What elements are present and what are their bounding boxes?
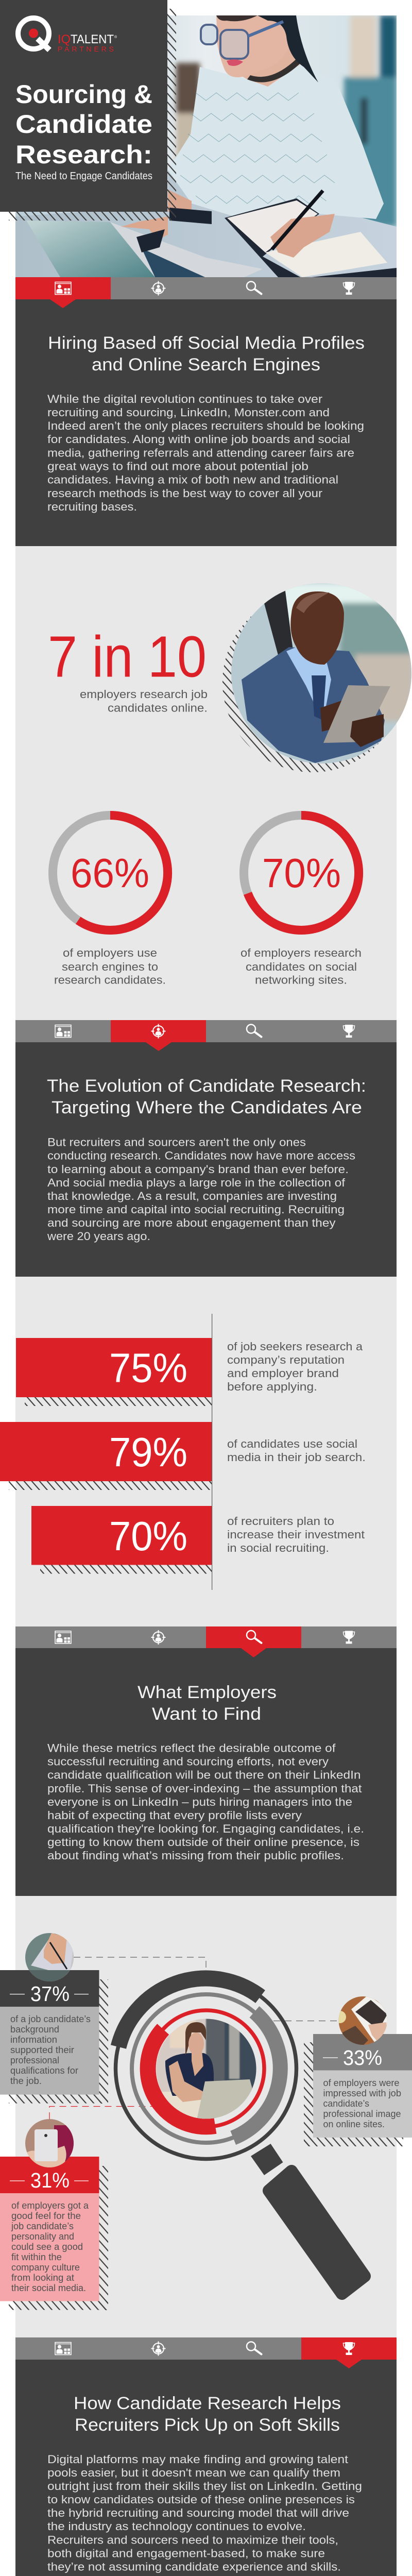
caption: 70 percent: increase their investment (227, 1528, 365, 1541)
body text: more time and capital into social recruiting. Recruiting (47, 1203, 345, 1216)
chart: 66 percent ring (53, 815, 168, 930)
body text: candidates. Having a mix of both new and traditional (47, 473, 338, 486)
heading: Recruiters Pick Up on Soft Skills (75, 2415, 340, 2435)
card: 33 percent: professional image (323, 2109, 401, 2119)
caption: 75 percent: and employer brand (227, 1367, 339, 1380)
caption: 79 percent (227, 1437, 366, 1464)
caption: social networking (241, 946, 362, 986)
card: 31 percent: of employers got a (11, 2200, 89, 2211)
body text: qualification they're looking for. Engaging candidates, i.e. (47, 1822, 364, 1835)
caption: search engines: research candidates. (54, 974, 166, 986)
body text: profile. This sense of over-indexing – the assumption that (47, 1782, 362, 1795)
caption: 79 percent: media in their job search. (227, 1451, 366, 1464)
stat caption: candidates online. (108, 702, 208, 715)
caption: 79 percent: of candidates use social (227, 1437, 357, 1450)
title (15, 80, 152, 169)
heading (138, 1683, 277, 1724)
bar: 75 percent (16, 1338, 212, 1406)
heading: and Online Search Engines (92, 355, 320, 375)
caption: social networking: of employers research (241, 946, 362, 959)
caption: social networking: candidates on social (246, 960, 357, 973)
card: 31 percent: personality and (11, 2231, 74, 2242)
body text: habit of expecting that every profile lists every (47, 1809, 302, 1822)
section nav: tab one active (15, 277, 397, 308)
body text: conducting research. Candidates now have more access (47, 1149, 355, 1162)
card: 33 percent (304, 1995, 412, 2146)
bar: 79 percent: 79% (109, 1429, 187, 1475)
card: 37 percent: professional (10, 2055, 59, 2065)
section nav: tab four active (15, 2337, 397, 2368)
card: 37 percent: supported their (10, 2045, 74, 2055)
body text: And social media plays a large role in the collection of (47, 1176, 346, 1189)
body text: Indeed aren’t the only places recruiters should be looking (47, 419, 364, 432)
body text: recruiting bases. (47, 500, 137, 513)
body text: for candidates. Along with online job boards and social (47, 433, 350, 446)
body text: and sourcing are more about engagement than they (47, 1216, 336, 1229)
card: 31 percent: good feel for the (11, 2211, 81, 2221)
caption: 75 percent (227, 1340, 363, 1393)
body text: candidate qualification will be out there on their LinkedIn (47, 1769, 360, 1782)
connector: 37 percent (74, 1957, 206, 1971)
body text: pools easier, but it doesn't mean we can qualify them (47, 2466, 340, 2479)
card: 31 percent: job candidate’s (11, 2221, 74, 2231)
card: 37 percent: of a job candidate’s (10, 2014, 91, 2024)
card: 33 percent: 33% (343, 2046, 382, 2070)
card: 33 percent: of employers were (323, 2078, 400, 2088)
body text (47, 1136, 355, 1243)
body text: the hybrid recruiting and sourcing model that will drive (47, 2506, 349, 2519)
card: 31 percent: could see a good (11, 2242, 83, 2252)
photo: hand holding phone (25, 2119, 75, 2168)
heading (47, 1076, 366, 1117)
heading (48, 333, 365, 375)
logo: IQTalent Partners: ® (114, 35, 117, 39)
heading: Targeting Where the Candidates Are (52, 1098, 362, 1117)
panel: evolution of candidate research (15, 1020, 397, 1277)
stat caption (80, 688, 208, 715)
body text: were 20 years ago. (47, 1230, 150, 1243)
body text: both digital and engagement-based, to make sure (47, 2547, 325, 2560)
body text: While these metrics reflect the desirable outcome of (47, 1741, 336, 1755)
heading: Want to Find (152, 1704, 261, 1724)
body text: research methods is the best way to cover all your (47, 487, 322, 500)
bar: 70 percent (31, 1506, 212, 1573)
body text: the industry as technology continues to evolve. (47, 2520, 306, 2533)
body text: to learning about a company's brand than ever before. (47, 1163, 349, 1176)
panel: employer research stats (15, 546, 412, 1020)
body text: recruiting and sourcing, LinkedIn, Monster.com and (47, 406, 330, 419)
card: 37 percent (0, 1933, 108, 2104)
body text: Digital platforms may make finding and growing talent (47, 2453, 348, 2466)
caption: search engines: of employers use (63, 946, 157, 959)
body text: While the digital revolution continues to take over (47, 393, 322, 405)
caption: 75 percent: of job seekers research a (227, 1340, 363, 1353)
panel: hero (0, 0, 397, 308)
caption: 70 percent: of recruiters plan to (227, 1515, 334, 1528)
stat: 7 in 10: 7 in 10 (48, 624, 207, 689)
subtitle: The Need to Engage Candidates (15, 171, 152, 182)
body text: they’re not assuming candidate experience and skills. (47, 2561, 341, 2573)
caption: 70 percent (227, 1515, 365, 1554)
heading (74, 2394, 341, 2435)
photo: hands typing (339, 1996, 387, 2045)
title: Sourcing & (15, 80, 152, 109)
caption: 75 percent: before applying. (227, 1380, 317, 1393)
card: 37 percent: 37% (30, 1982, 70, 2006)
card: 37 percent: qualifications for (10, 2065, 78, 2076)
section nav: tab three active (15, 1626, 397, 1657)
body text (47, 1741, 364, 1862)
stat caption: employers research job (80, 688, 208, 701)
card: 31 percent: their social media. (11, 2283, 86, 2293)
bar: 75 percent: 75% (109, 1345, 187, 1391)
title: Research: (15, 140, 152, 169)
logo: IQTalent Partners: TALENT (71, 32, 114, 46)
card: 31 percent: 31% (30, 2168, 70, 2192)
connector: 33 percent (273, 2021, 340, 2022)
body text: about finding what’s missing from their public profiles. (47, 1849, 344, 1862)
body text: everyone is on LinkedIn – puts hiring managers into the (47, 1795, 352, 1808)
panel: magnifier findings (0, 1896, 412, 2337)
logo: IQTalent Partners: IQ (58, 32, 71, 46)
section nav: tab two active (15, 1020, 397, 1051)
body text: that knowledge. As a result, companies are investing (47, 1190, 337, 1202)
body text: Recruiters and sourcers need to maximize their tools, (47, 2534, 338, 2546)
card: 37 percent: background (10, 2024, 59, 2035)
caption: search engines: search engines to (62, 960, 158, 973)
title: Candidate (15, 110, 152, 139)
card: 31 percent (0, 2119, 108, 2310)
panel: what employers want to find (15, 1626, 397, 1896)
photo: woman at laptop (154, 2017, 258, 2120)
panel: hiring intro (15, 299, 397, 546)
card: 31 percent: from looking at (11, 2273, 74, 2283)
card: 33 percent: candidate’s (323, 2098, 369, 2109)
hero photo: woman writing at desk (15, 15, 397, 278)
body text: But recruiters and sourcers aren't the only ones (47, 1136, 306, 1149)
logo: IQTalent Partners: PARTNERS (58, 45, 114, 53)
body text: outright just from their skills they list on LinkedIn. Getting (47, 2480, 362, 2493)
chart: 70 percent ring (244, 815, 359, 930)
card: 37 percent: the job. (10, 2076, 42, 2086)
heading: What Employers (138, 1683, 277, 1702)
body text: media, gathering referrals and attending career fairs are (47, 446, 354, 460)
card: 31 percent: company culture (11, 2262, 80, 2273)
caption: social networking: networking sites. (255, 974, 347, 986)
card: 33 percent: on online sites. (323, 2119, 385, 2129)
body text: getting to know them outside of their online presence, is (47, 1836, 359, 1849)
logo: IQTalent Partners (18, 18, 117, 53)
chart: 70 percent ring: 70% (262, 850, 341, 896)
bar: 79 percent (0, 1422, 212, 1490)
panel: soft skills (15, 2337, 397, 2576)
body text: successful recruiting and sourcing efforts, not every (47, 1755, 329, 1768)
body text (47, 2453, 362, 2573)
card: 33 percent: impressed with job (323, 2088, 401, 2098)
heading: How Candidate Research Helps (74, 2394, 341, 2413)
photo: hand writing (25, 1933, 74, 1982)
caption: 75 percent: company’s reputation (227, 1353, 345, 1366)
chart: 66 percent ring: 66% (71, 850, 149, 896)
illustration: magnifying glass (115, 1978, 365, 2294)
body text (47, 393, 364, 513)
bar: 70 percent: 70% (109, 1513, 187, 1559)
panel: candidate behaviour bars (0, 1277, 397, 1626)
body text: to know candidates outside of these online presences is (47, 2493, 355, 2506)
body text: great ways to find out more about potential job (47, 460, 308, 473)
card: 37 percent: information (10, 2035, 57, 2045)
card: 31 percent: fit within the (11, 2252, 62, 2262)
heading: The Evolution of Candidate Research: (47, 1076, 366, 1096)
caption: 70 percent: in social recruiting. (227, 1541, 329, 1554)
photo: man with tablet (231, 583, 412, 764)
connector: 31 percent (49, 2106, 152, 2119)
heading: Hiring Based off Social Media Profiles (48, 333, 365, 353)
caption: search engines (54, 946, 166, 986)
